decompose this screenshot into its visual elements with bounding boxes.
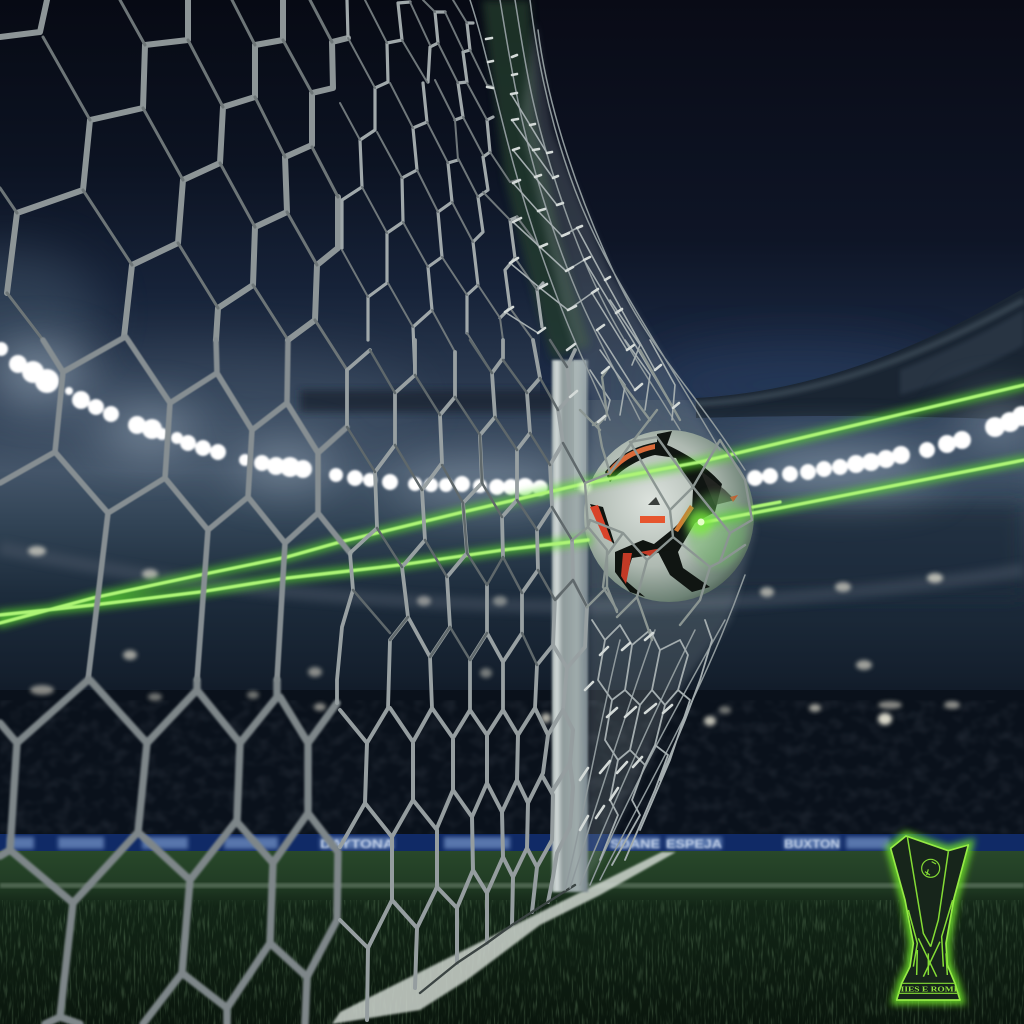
trophy base text: IIES E ROMI (901, 985, 958, 993)
floodlight row (0, 342, 1024, 500)
ball lower black patch (615, 540, 658, 597)
advertising boards: DAYTONA (320, 837, 394, 851)
net: lower centre (340, 708, 573, 1020)
ball left black and red patch (590, 504, 615, 545)
soccer ball (584, 430, 754, 602)
green laser beams (0, 385, 1024, 623)
net: lattice below ball (592, 620, 712, 865)
advertising boards: SDANE (610, 837, 660, 851)
stand spot lights (28, 546, 960, 726)
goal post (552, 360, 588, 892)
ball top black and orange band (605, 431, 722, 592)
net: top centre (342, 0, 543, 375)
net: right side lattice above ball (505, 94, 675, 420)
net: centre thin diagonals (347, 340, 587, 665)
net: right fan curves (470, 0, 745, 890)
net: upper left thin diagonals (0, 0, 347, 370)
trophy glow (891, 836, 968, 1000)
net: lower left blurred foreground (0, 680, 338, 1024)
green shadow stripe behind net (482, 0, 590, 360)
net: white knot ticks on the right (486, 38, 679, 830)
advertising boards (0, 834, 1024, 852)
ball orange dash (640, 516, 665, 523)
side netting haze (520, 20, 755, 885)
trophy emblem (891, 836, 968, 1000)
net: upper left heavy segments (0, 0, 348, 340)
trophy silhouette (891, 836, 968, 1000)
hexagonal goal net (0, 0, 752, 1024)
net: ground edge (420, 885, 575, 993)
net: centre panel (337, 340, 587, 710)
net: middle left (0, 337, 350, 680)
net: top centre thin diagonals (340, 0, 540, 373)
trophy inner lines (898, 837, 959, 993)
pitch (0, 851, 1024, 1024)
advertising boards: BUXTON (784, 837, 840, 851)
crowd (0, 700, 1024, 834)
net: right side hexes around post and ball (572, 350, 752, 640)
trophy ball badge (922, 859, 940, 877)
advertising boards: ESPEJA (666, 837, 722, 851)
